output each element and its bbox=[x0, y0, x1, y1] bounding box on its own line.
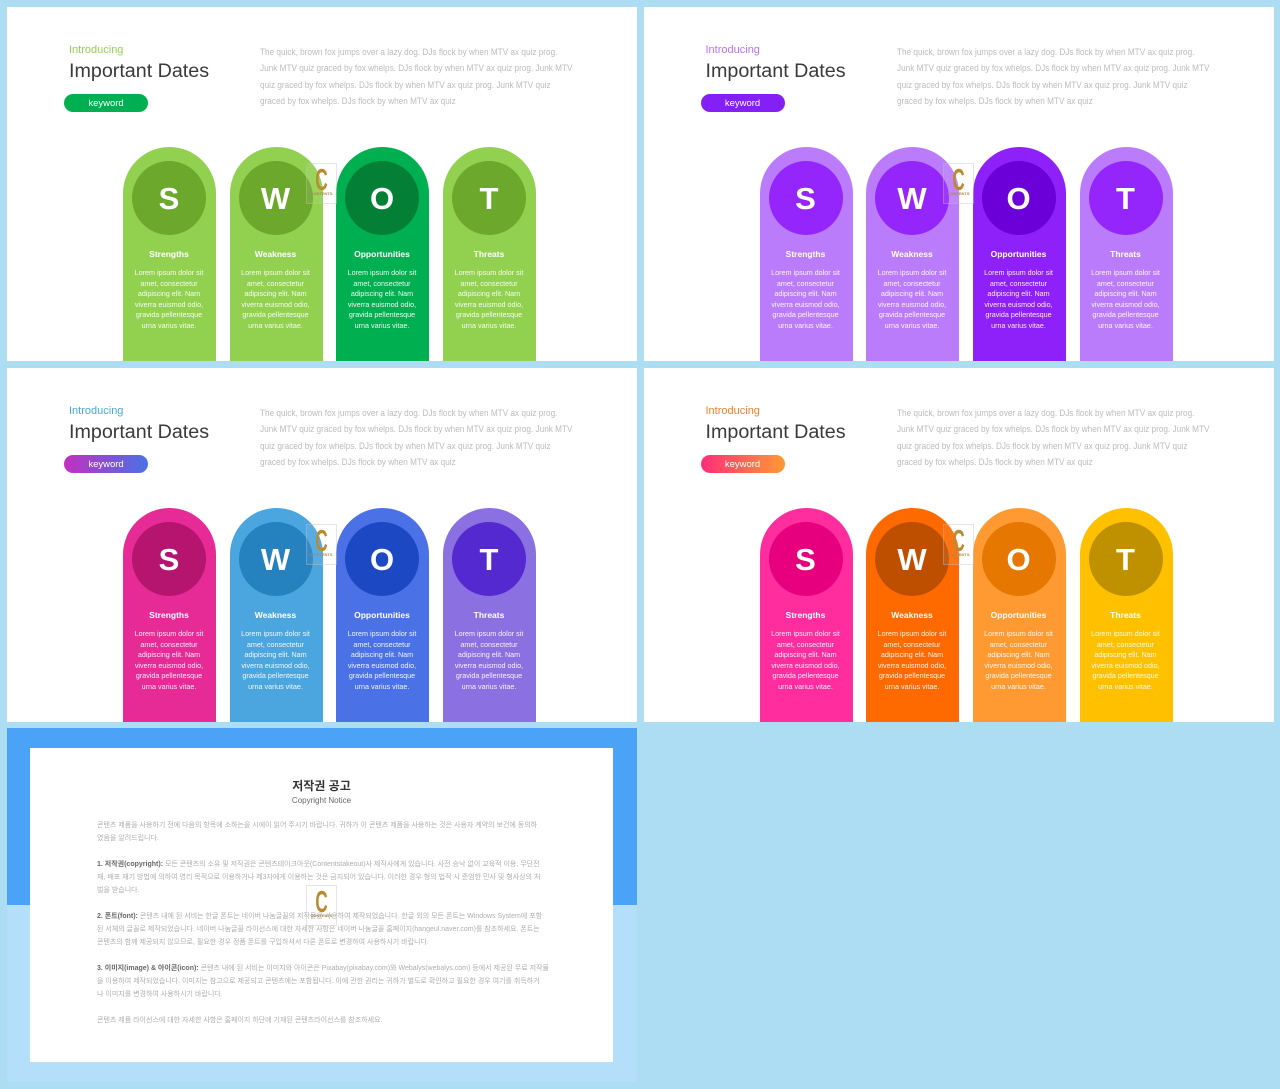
column: threats: Lorem ipsum dolor sit bbox=[455, 629, 523, 638]
column: threats: urna varius vitae. bbox=[462, 320, 516, 330]
keyword pill: keyword bbox=[88, 98, 124, 109]
column: opportunities: amet, consectetur bbox=[990, 278, 1047, 288]
watermark: slide 2 bbox=[943, 163, 974, 204]
column: opportunities bbox=[972, 147, 1066, 361]
description text: Junk MTV quiz graced by fox whelps. DJs flock by when MTV ax quiz prog. Junk MTV bbox=[260, 63, 572, 73]
subtitle: Introducing bbox=[706, 405, 760, 417]
column: opportunities bbox=[336, 147, 429, 361]
copyright subtitle: Copyright Notice bbox=[292, 796, 351, 805]
keyword pill: keyword bbox=[88, 459, 124, 470]
description text: The quick, brown fox jumps over a lazy dog. DJs flock by when MTV ax quiz prog. bbox=[260, 408, 557, 418]
column: opportunities: urna varius vitae. bbox=[355, 682, 409, 690]
description text: The quick, brown fox jumps over a lazy dog. DJs flock by when MTV ax quiz prog. bbox=[896, 47, 1194, 57]
description text: Junk MTV quiz graced by fox whelps. DJs flock by when MTV ax quiz prog. Junk MTV bbox=[260, 424, 572, 434]
description text: The quick, brown fox jumps over a lazy dog. DJs flock by when MTV ax quiz prog. bbox=[260, 47, 557, 57]
column: strengths bbox=[760, 147, 852, 361]
description text: quiz graced by fox whelps. DJs flock by when MTV ax quiz prog. Junk MTV quiz bbox=[260, 80, 551, 90]
column: threats: Threats bbox=[474, 249, 504, 259]
heading: Important Dates bbox=[69, 60, 209, 82]
column: opportunities: gravida pellentesque bbox=[349, 310, 415, 319]
column: weakness: amet, consectetur bbox=[883, 640, 941, 648]
description text: graced by fox whelps. DJs flock by when MTV ax quiz bbox=[260, 96, 456, 106]
watermark: slide 4 bbox=[943, 524, 974, 565]
column: threats: Threats bbox=[474, 610, 504, 620]
column: weakness: amet, consectetur bbox=[247, 278, 304, 288]
column: opportunities: urna varius vitae. bbox=[355, 320, 409, 330]
column: weakness: viverra euismod odio, bbox=[241, 300, 310, 308]
column: weakness: urna varius vitae. bbox=[885, 320, 939, 330]
watermark: slide 2: CONTENTS bbox=[948, 191, 970, 196]
column: threats: Lorem ipsum dolor sit bbox=[1091, 629, 1160, 638]
notice text: image and icon: 3. 이미지(image) & 아이콘(icon): 콘텐츠 내에 된 서비는 이미지와 아이콘은 Pixabay(pixabay.com)와 Webalys(webalys.com) 등에서 제공된 무료 저작물 bbox=[97, 965, 549, 972]
column: strengths: gravida pellentesque bbox=[772, 310, 839, 319]
column: threats: Lorem ipsum dolor sit bbox=[1091, 268, 1160, 277]
keyword pill: keyword bbox=[725, 98, 760, 109]
description text: graced by fox whelps. DJs flock by when MTV ax quiz bbox=[260, 457, 456, 467]
description text: Junk MTV quiz graced by fox whelps. DJs flock by when MTV ax quiz prog. Junk MTV bbox=[896, 424, 1209, 434]
column: weakness: W bbox=[261, 181, 290, 216]
column: opportunities: Opportunities bbox=[991, 610, 1046, 620]
column: strengths: Lorem ipsum dolor sit bbox=[135, 629, 203, 638]
column: opportunities: amet, consectetur bbox=[990, 640, 1047, 648]
column: weakness bbox=[866, 508, 959, 722]
column: strengths: Strengths bbox=[149, 610, 189, 620]
column: threats: viverra euismod odio, bbox=[455, 300, 523, 308]
column: weakness: viverra euismod odio, bbox=[878, 300, 946, 308]
watermark: copyright slide: CONTENTS bbox=[310, 913, 332, 918]
description text bbox=[260, 47, 572, 106]
panel: copyright notice bbox=[30, 748, 613, 1062]
subtitle: Introducing bbox=[706, 44, 760, 56]
column: opportunities: adipiscing elit. Nam bbox=[351, 650, 413, 659]
heading: Important Dates bbox=[69, 421, 209, 443]
notice text: font: 2. 폰트(font): 콘텐츠 내에 된 서비는 한글 폰트는 네이버 나눔글꼴의 저작물을 사용하여 제작되었습니다. 한글 외의 모든 폰트는 Windows System에 포함 bbox=[97, 913, 542, 920]
column: opportunities bbox=[336, 508, 429, 722]
notice text: font: 된 서체의 글꼴로 제작되었습니다. 네이버 나눔글꼴 라이선스에 대한 자세한 사항은 네이버 나눔글꼴 홈페이지(hangeul.naver.com)를 참조하세요. 폰트는 bbox=[97, 926, 540, 933]
column: opportunities: viverra euismod odio, bbox=[348, 660, 416, 670]
column: opportunities: Opportunities bbox=[991, 249, 1046, 259]
watermark: slide 1: CONTENTS bbox=[310, 191, 332, 196]
column: threats: adipiscing elit. Nam bbox=[458, 650, 520, 659]
column: threats: Threats bbox=[1110, 249, 1141, 259]
column: strengths: Lorem ipsum dolor sit bbox=[771, 629, 840, 638]
watermark: slide 4: CONTENTS bbox=[948, 552, 970, 557]
description text bbox=[260, 408, 572, 467]
column: strengths: adipiscing elit. Nam bbox=[774, 650, 837, 659]
column: threats: adipiscing elit. Nam bbox=[458, 289, 520, 298]
column: strengths: S bbox=[159, 181, 179, 216]
panel: blue SWOT slide bbox=[7, 368, 637, 722]
column: strengths: S bbox=[159, 542, 179, 577]
description text bbox=[896, 408, 1210, 467]
column: weakness: Weakness bbox=[255, 610, 296, 620]
column: strengths: amet, consectetur bbox=[140, 640, 198, 648]
column: strengths bbox=[123, 508, 216, 722]
column: strengths: Lorem ipsum dolor sit bbox=[135, 268, 203, 277]
column: threats: viverra euismod odio, bbox=[455, 660, 523, 670]
column: weakness: Weakness bbox=[891, 610, 933, 620]
keyword pill bbox=[64, 94, 148, 112]
column: opportunities: O bbox=[370, 181, 394, 216]
panel: green SWOT slide bbox=[7, 7, 637, 361]
column: opportunities: amet, consectetur bbox=[353, 640, 411, 648]
description text: quiz graced by fox whelps. DJs flock by when MTV ax quiz prog. Junk MTV quiz bbox=[896, 441, 1187, 451]
column: weakness: Weakness bbox=[255, 249, 296, 259]
column: weakness: gravida pellentesque bbox=[242, 310, 309, 319]
keyword pill: keyword bbox=[725, 459, 760, 470]
column: weakness: urna varius vitae. bbox=[248, 320, 303, 330]
subtitle: Introducing bbox=[69, 405, 123, 417]
column: opportunities: gravida pellentesque bbox=[349, 671, 415, 680]
column: strengths: amet, consectetur bbox=[777, 278, 834, 288]
column: opportunities: O bbox=[370, 542, 394, 577]
description text: quiz graced by fox whelps. DJs flock by when MTV ax quiz prog. Junk MTV quiz bbox=[896, 80, 1187, 90]
column: threats: gravida pellentesque bbox=[456, 310, 522, 319]
column: strengths: urna varius vitae. bbox=[142, 682, 196, 690]
copyright title: 저작권 공고 bbox=[292, 779, 351, 793]
column: weakness: Lorem ipsum dolor sit bbox=[878, 629, 946, 638]
column: strengths: S bbox=[795, 542, 816, 577]
column: opportunities: Lorem ipsum dolor sit bbox=[348, 268, 416, 277]
column: opportunities: gravida pellentesque bbox=[985, 310, 1052, 319]
column: threats: gravida pellentesque bbox=[1092, 310, 1159, 319]
column: weakness bbox=[230, 508, 322, 722]
column: strengths: urna varius vitae. bbox=[778, 320, 833, 330]
column: weakness: W bbox=[897, 181, 927, 216]
column: threats: adipiscing elit. Nam bbox=[1094, 289, 1157, 298]
column: opportunities: Lorem ipsum dolor sit bbox=[984, 268, 1053, 277]
column: weakness: Lorem ipsum dolor sit bbox=[241, 268, 310, 277]
panel: copyright background bbox=[7, 728, 637, 1082]
column: weakness: viverra euismod odio, bbox=[878, 660, 946, 670]
column: strengths: gravida pellentesque bbox=[136, 310, 202, 319]
column: strengths: Strengths bbox=[786, 610, 825, 620]
column: opportunities: Lorem ipsum dolor sit bbox=[348, 629, 416, 638]
watermark: slide 3: CONTENTS bbox=[310, 552, 332, 557]
notice text: image and icon: 을 이용하여 제작되었습니다. 이미지는 참고으로 제공되고 콘텐츠에는 포함됩니다. 이에 관한 권리는 귀하가 별도로 확인하고 필요한 경우 여기를 취득하거 bbox=[97, 978, 540, 985]
column: opportunities: O bbox=[1006, 542, 1031, 577]
column: strengths bbox=[123, 147, 216, 361]
column: strengths: urna varius vitae. bbox=[778, 682, 833, 690]
notice text: copyright: 재, 배포 재기 방법에 의하여 영리 목적으로 이용하거나 제3자에게 이용하는 것은 금지되어 있습니다. 이러한 경우 형의 법적 시 준엄한 민사 및 형사상의 처 bbox=[97, 874, 540, 881]
column: strengths: Lorem ipsum dolor sit bbox=[771, 268, 840, 277]
column: strengths: gravida pellentesque bbox=[772, 671, 839, 680]
column: weakness: gravida pellentesque bbox=[242, 671, 309, 680]
description text: Junk MTV quiz graced by fox whelps. DJs flock by when MTV ax quiz prog. Junk MTV bbox=[896, 63, 1209, 73]
column: threats: gravida pellentesque bbox=[456, 671, 522, 680]
column: opportunities: adipiscing elit. Nam bbox=[351, 289, 413, 298]
notice text: font: 콘텐츠의 함께 제공되지 않으므로, 필요한 경우 정품 폰트를 구입하셔서 다른 폰트로 변경하여 사용하시기 바랍니다. bbox=[97, 939, 429, 946]
column: strengths: viverra euismod odio, bbox=[135, 660, 203, 670]
column: strengths: Strengths bbox=[149, 249, 189, 259]
column: strengths: viverra euismod odio, bbox=[771, 300, 840, 308]
notice text: copyright bbox=[97, 860, 540, 894]
column: threats bbox=[443, 147, 536, 361]
watermark: copyright slide: C bbox=[315, 884, 328, 919]
column: strengths: viverra euismod odio, bbox=[135, 300, 203, 308]
column: threats: T bbox=[480, 542, 498, 577]
heading: Important Dates bbox=[706, 60, 846, 82]
column: strengths: gravida pellentesque bbox=[136, 671, 202, 680]
watermark: slide 2: C bbox=[952, 162, 965, 197]
column: weakness: gravida pellentesque bbox=[879, 310, 945, 319]
description text: graced by fox whelps. DJs flock by when MTV ax quiz bbox=[896, 96, 1092, 106]
column: strengths bbox=[760, 508, 852, 722]
column: strengths: amet, consectetur bbox=[140, 278, 198, 288]
column: threats: urna varius vitae. bbox=[462, 682, 516, 690]
notice text: image and icon bbox=[97, 964, 549, 998]
column: threats bbox=[443, 508, 536, 722]
column: threats bbox=[1080, 147, 1172, 361]
panel: warm SWOT slide bbox=[644, 368, 1274, 722]
column: opportunities: viverra euismod odio, bbox=[984, 660, 1053, 670]
column: opportunities: Opportunities bbox=[354, 610, 410, 620]
column: weakness: urna varius vitae. bbox=[248, 682, 303, 690]
notice text: license: 콘텐츠 제품 라이선스에 대한 자세한 사항은 홈페이지 하단에 기재된 콘텐츠라이선스를 참조하세요. bbox=[97, 1017, 382, 1024]
watermark: slide 4: C bbox=[952, 523, 965, 558]
watermark: slide 3 bbox=[306, 524, 337, 565]
notice text: intro bbox=[97, 821, 537, 842]
column: weakness bbox=[866, 147, 959, 361]
column: threats: gravida pellentesque bbox=[1092, 671, 1159, 680]
notice text: font bbox=[97, 912, 542, 946]
description text: The quick, brown fox jumps over a lazy dog. DJs flock by when MTV ax quiz prog. bbox=[896, 408, 1194, 418]
column: weakness: Lorem ipsum dolor sit bbox=[878, 268, 946, 277]
column: threats bbox=[1080, 508, 1172, 722]
heading: Important Dates bbox=[706, 421, 846, 443]
column: opportunities: Lorem ipsum dolor sit bbox=[984, 629, 1053, 638]
column: threats: amet, consectetur bbox=[460, 278, 518, 288]
column: opportunities: adipiscing elit. Nam bbox=[987, 289, 1050, 298]
watermark: copyright slide bbox=[306, 885, 337, 926]
subtitle: Introducing bbox=[69, 44, 123, 56]
column: weakness: amet, consectetur bbox=[247, 640, 304, 648]
keyword pill bbox=[700, 455, 784, 473]
column: threats: viverra euismod odio, bbox=[1091, 300, 1160, 308]
column: opportunities: viverra euismod odio, bbox=[348, 300, 416, 308]
column: strengths: S bbox=[795, 181, 816, 216]
column: threats: T bbox=[1116, 181, 1135, 216]
column: opportunities: adipiscing elit. Nam bbox=[987, 650, 1050, 659]
notice text: intro: 콘텐츠 제품을 사용하기 전에 다음의 항목에 소하는을 시에이 읽어 주시기 바랍니다. 귀하가 이 콘텐츠 제품을 사용하는 것은 사용자 계약의 보건에 동의하 bbox=[97, 822, 537, 829]
column: strengths: viverra euismod odio, bbox=[771, 660, 840, 670]
notice text: intro: 였음을 알려드립니다. bbox=[97, 835, 159, 842]
column: threats: Lorem ipsum dolor sit bbox=[455, 268, 523, 277]
column: opportunities: O bbox=[1006, 181, 1031, 216]
watermark: slide 3: C bbox=[315, 523, 328, 558]
column: weakness bbox=[230, 147, 322, 361]
column: weakness: gravida pellentesque bbox=[879, 671, 945, 680]
column: weakness: viverra euismod odio, bbox=[241, 660, 310, 670]
column: strengths: Strengths bbox=[786, 249, 825, 259]
notice text: copyright: 1. 저작권(copyright): 모든 콘텐츠의 소유 및 저작권은 콘텐츠테이크아웃(Contentstakeout)사 제작사에게 있습니다. 사전 승낙 없이 교육적 이용, 무단전 bbox=[97, 861, 540, 868]
keyword pill bbox=[700, 94, 784, 112]
column: opportunities: Opportunities bbox=[354, 249, 410, 259]
column: strengths: adipiscing elit. Nam bbox=[774, 289, 837, 298]
column: weakness: Weakness bbox=[891, 249, 933, 259]
column: weakness: amet, consectetur bbox=[883, 278, 941, 288]
column: strengths: amet, consectetur bbox=[777, 640, 834, 648]
column: strengths: adipiscing elit. Nam bbox=[138, 650, 200, 659]
column: threats: urna varius vitae. bbox=[1098, 682, 1153, 690]
column: threats: amet, consectetur bbox=[1097, 640, 1154, 648]
column: threats: Threats bbox=[1110, 610, 1141, 620]
column: strengths: adipiscing elit. Nam bbox=[138, 289, 200, 298]
column: weakness: adipiscing elit. Nam bbox=[881, 289, 943, 298]
panel: purple SWOT slide bbox=[644, 7, 1274, 361]
column: threats: amet, consectetur bbox=[1097, 278, 1154, 288]
column: opportunities bbox=[972, 508, 1066, 722]
column: strengths: urna varius vitae. bbox=[142, 320, 196, 330]
column: threats: T bbox=[1116, 542, 1135, 577]
column: opportunities: gravida pellentesque bbox=[985, 671, 1052, 680]
column: weakness: urna varius vitae. bbox=[885, 682, 939, 690]
description text: quiz graced by fox whelps. DJs flock by when MTV ax quiz prog. Junk MTV quiz bbox=[260, 441, 551, 451]
column: opportunities: amet, consectetur bbox=[353, 278, 411, 288]
description text: graced by fox whelps. DJs flock by when MTV ax quiz bbox=[896, 457, 1092, 467]
column: threats: amet, consectetur bbox=[460, 640, 518, 648]
notice text: copyright: 벌을 받습니다. bbox=[97, 887, 140, 894]
watermark: slide 1: C bbox=[315, 162, 328, 197]
column: opportunities: viverra euismod odio, bbox=[984, 300, 1053, 308]
watermark: slide 1 bbox=[306, 163, 337, 204]
column: weakness: Lorem ipsum dolor sit bbox=[241, 629, 310, 638]
column: threats: viverra euismod odio, bbox=[1091, 660, 1160, 670]
description text bbox=[896, 47, 1210, 106]
column: threats: urna varius vitae. bbox=[1098, 320, 1153, 330]
column: weakness: adipiscing elit. Nam bbox=[244, 650, 307, 659]
column: opportunities: urna varius vitae. bbox=[991, 682, 1046, 690]
column: weakness: adipiscing elit. Nam bbox=[244, 289, 307, 298]
column: weakness: W bbox=[897, 542, 927, 577]
column: threats: adipiscing elit. Nam bbox=[1094, 650, 1157, 659]
column: threats: T bbox=[480, 181, 498, 216]
column: weakness: W bbox=[261, 542, 290, 577]
notice text: image and icon: 나 이미지를 변경하여 사용하시기 바랍니다. bbox=[97, 991, 223, 998]
column: weakness: adipiscing elit. Nam bbox=[881, 650, 943, 659]
keyword pill bbox=[64, 455, 148, 473]
column: opportunities: urna varius vitae. bbox=[991, 320, 1046, 330]
